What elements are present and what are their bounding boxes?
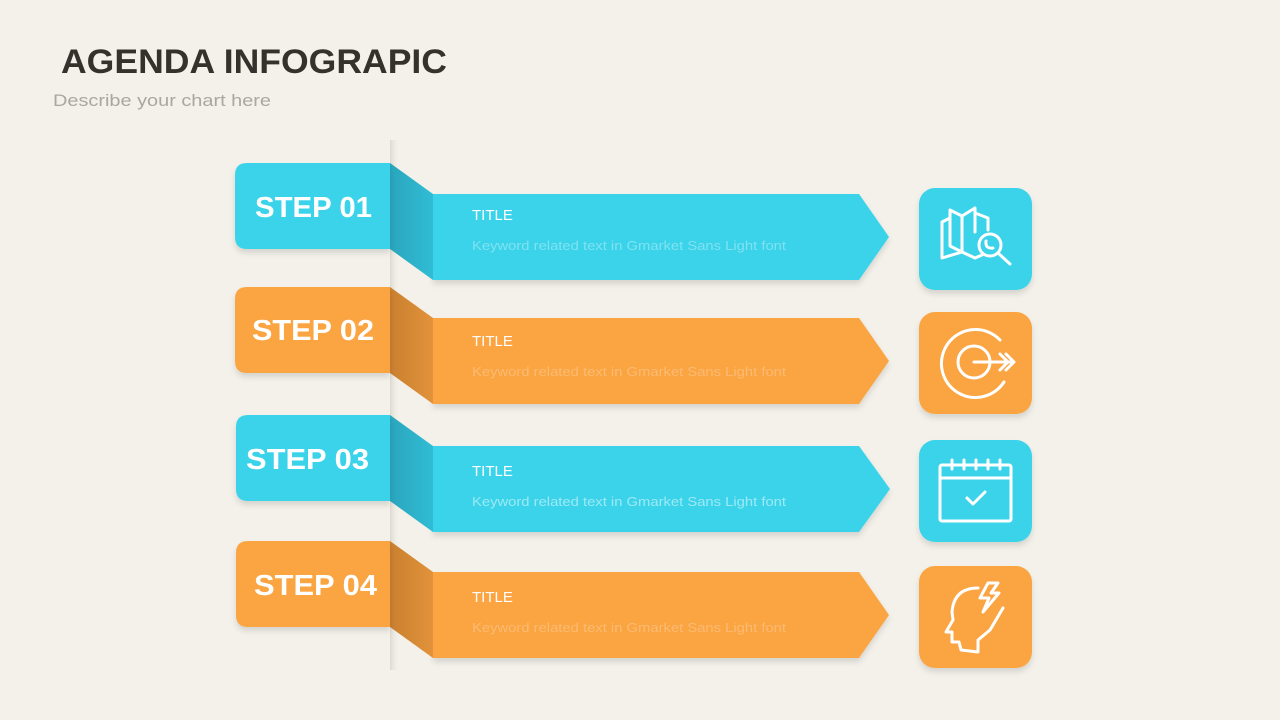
spine shadow — [390, 140, 400, 670]
step row 1: TITLE — [472, 207, 513, 224]
step row 3: Keyword related text in Gmarket Sans Light font — [472, 494, 786, 509]
step row 2: STEP 02 — [252, 315, 374, 347]
step row 2: Keyword related text in Gmarket Sans Light font — [472, 364, 786, 379]
icon: target — [919, 312, 1032, 414]
step row 4: TITLE — [472, 589, 513, 606]
step row 1: Keyword related text in Gmarket Sans Light font — [472, 238, 786, 253]
step row 4: STEP 04 — [254, 570, 377, 602]
step row 2: TITLE — [472, 333, 513, 350]
step row 4 — [236, 541, 889, 658]
step row 3 — [236, 415, 890, 532]
step row 3: STEP 03 — [246, 444, 369, 476]
title: AGENDA INFOGRAPIC — [61, 43, 447, 81]
icon: calendar check — [919, 440, 1032, 542]
step row 3: TITLE — [472, 463, 513, 480]
icon: map search — [919, 188, 1032, 290]
step row 4: Keyword related text in Gmarket Sans Light font — [472, 620, 786, 635]
subtitle: Describe your chart here — [53, 91, 271, 110]
step row 2 — [235, 287, 889, 404]
step row 1 — [235, 163, 889, 280]
icon: head with lightning — [919, 566, 1032, 668]
step row 1: STEP 01 — [255, 192, 372, 224]
